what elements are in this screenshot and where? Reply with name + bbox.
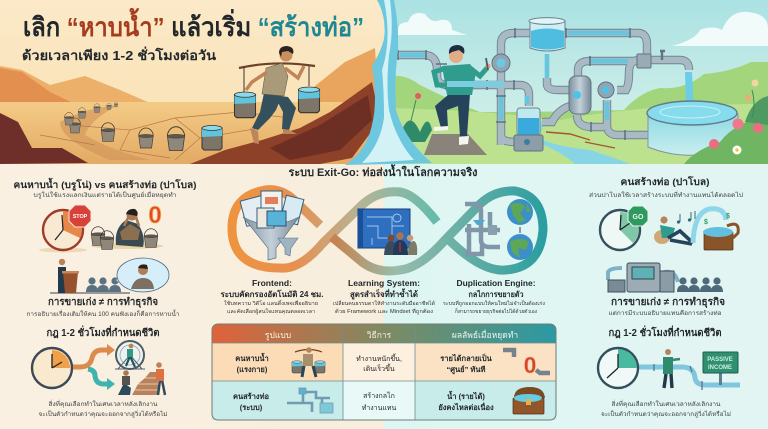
icon: pipe system mini bbox=[287, 388, 333, 413]
title: เลิก “หาบน้ำ” แล้วเริ่ม “สร้างท่อ” bbox=[23, 7, 364, 42]
gauge on valve bbox=[492, 54, 510, 72]
heading: carrier vs builder: คนหาบน้ำ (บรูโน่) vs คนสร้างท่อ (ปาโบล) bbox=[14, 177, 196, 192]
row: pipe builder bbox=[233, 390, 494, 412]
text: Learning System: Learning System: bbox=[348, 279, 420, 288]
text: Frontend bbox=[220, 279, 324, 315]
text: rule note left bbox=[38, 400, 168, 418]
table header: รูปแบบ bbox=[265, 330, 291, 341]
text: Learning System bbox=[333, 279, 435, 315]
icon: clock with branching arrows bbox=[32, 344, 115, 390]
water stream divider bbox=[345, 0, 432, 165]
icon: speaker at podium bbox=[50, 259, 130, 293]
comparison table bbox=[212, 324, 556, 420]
table header: ผลลัพธ์เมื่อหยุดทำ bbox=[452, 329, 518, 341]
clouds bbox=[398, 12, 768, 46]
pipe network bbox=[398, 28, 689, 145]
icon: builder laying bricks bbox=[118, 362, 165, 395]
row: water carrier bbox=[235, 352, 493, 375]
lower background bbox=[0, 160, 768, 429]
row: pipe builder: ยังคงไหลต่อเนื่อง bbox=[438, 401, 494, 412]
heading: Pablo: คนสร้างท่อ (ปาโบล) bbox=[620, 176, 710, 188]
row: pipe builder: ทำงานแทน bbox=[362, 404, 397, 412]
icon: zero with broken pipe: 0 bbox=[524, 352, 536, 378]
pump tank bbox=[514, 108, 543, 151]
icon: pipeline to passive income: PASSIVE bbox=[707, 357, 733, 363]
river bbox=[527, 122, 630, 164]
row: water carrier: ทำงานหนักขึ้น, bbox=[356, 352, 402, 363]
text: Learning System: สูตรสำเร็จที่ทำซ้ำได้ bbox=[350, 288, 418, 300]
icon: water flowing into treasure chest: $ bbox=[726, 213, 730, 220]
text: system note: แต่การมีระบบอธิบายแทนคือการสร้างท่อ bbox=[608, 309, 722, 317]
icon: funnel with documents bbox=[240, 191, 304, 260]
text: Frontend: ระบบคัดกรองอัตโนมัติ 24 ชม. bbox=[220, 289, 324, 299]
icon: hamster wheel runner bbox=[115, 341, 145, 369]
icon: despairing man with empty buckets bbox=[91, 209, 163, 250]
row: pipe builder: น้ำ (รายได้) bbox=[447, 390, 485, 401]
text: rule note left: สิ่งที่คุณเลือกทำในเศษเวลาหลังเลิกงาน bbox=[48, 400, 158, 408]
text: Pablo description: ส่วนปาโบลใช้เวลาสร้างระบบที่ทำงานแทนได้ตลอดไป bbox=[589, 191, 743, 199]
text: rule note right bbox=[601, 400, 731, 418]
text: selling note: การอธิบายเรื่องเดิมให้คน 100 คนฟังเองก็คือการหาบน้ำ bbox=[26, 308, 180, 318]
central filter vessel bbox=[569, 76, 614, 114]
heading: Exit-Go system: ระบบ Exit-Go: ท่อส่งน้ำในโลกความจริง bbox=[288, 164, 478, 179]
text: rule note left: จะเป็นตัวกำหนดว่าคุณจะออกจากลู่วิ่งได้หรือไม่ bbox=[38, 409, 168, 418]
tap valve bbox=[637, 51, 665, 68]
falling water bbox=[685, 72, 694, 110]
text: Duplication Engine: Duplication Engine: bbox=[456, 279, 536, 288]
text: Frontend: และคัดเลือกผู้สนใจแทนคุณตลอดเวลา bbox=[227, 308, 315, 315]
heading: 1-2 hour rule right: กฎ 1-2 ชั่วโมงที่กำหนดชีวิต bbox=[608, 325, 722, 339]
icon: thought cloud bbox=[116, 258, 169, 292]
rock: right ridge bbox=[190, 82, 380, 164]
icon: water flowing into treasure chest bbox=[693, 209, 738, 250]
small buckets on the trail bbox=[64, 102, 222, 150]
icon: treasure chest bbox=[513, 387, 545, 414]
panel: right column (pipe builder) bbox=[589, 176, 743, 418]
text: bruno description: บรูโน่ใช้แรงแลกเงินแต่รายได้เป็นศูนย์เมื่อหยุดทำ bbox=[34, 190, 176, 199]
heading: selling vs business right: การขายเก่ง ≠ การทำธุรกิจ bbox=[611, 296, 725, 308]
row: pipe builder: คนสร้างท่อ bbox=[233, 392, 269, 401]
table header bbox=[265, 329, 518, 341]
scene: pipe builder landscape bbox=[384, 0, 768, 164]
icon: zero with broken pipe bbox=[503, 350, 550, 378]
icon: clock with stop sign: STOP bbox=[73, 214, 88, 220]
subtitle: ด้วยเวลาเพียง 1-2 ชั่วโมงต่อวัน bbox=[22, 46, 216, 63]
rock: left bbox=[0, 113, 88, 164]
text: Duplication Engine: ระบบที่ถูกออกแบบให้คนใหม่ไม่จำเป็นต้องเก่ง bbox=[443, 299, 546, 307]
icon: machine bbox=[608, 263, 678, 292]
icon: red zero: 0 bbox=[148, 202, 162, 229]
icon: pipeline to passive income: INCOME bbox=[708, 365, 732, 371]
text: Frontend: ใช้บทความ วิดีโอ แลนดิ้งเพจเพื่ออธิบาย bbox=[224, 298, 318, 307]
icon: audience right bbox=[677, 277, 723, 292]
icon: relaxing man with music bbox=[654, 211, 695, 244]
panel: centre system bbox=[212, 164, 556, 420]
text: rule note right: จะเป็นตัวกำหนดว่าคุณจะออกจากลู่วิ่งได้หรือไม่ bbox=[601, 409, 731, 418]
character: pipe builder bbox=[434, 45, 504, 145]
row: pipe builder: (ระบบ) bbox=[240, 403, 263, 412]
text: Learning System: เปลี่ยนคนธรรมดาให้ทำงานระดับมืออาชีพได้ bbox=[333, 300, 435, 307]
table header: วิธีการ bbox=[367, 330, 392, 340]
row: pipe builder: สร้างกลไก bbox=[363, 391, 395, 400]
panel: left column (water carrier) bbox=[14, 177, 196, 418]
icon: blueprint with team bbox=[358, 209, 417, 255]
icon: carrier mini bbox=[292, 347, 325, 377]
text: Duplication Engine: ก็สามารถขยายธุรกิจต่อไปได้ด้วยตัวเอง bbox=[455, 307, 538, 315]
heading: selling vs business: การขายเก่ง ≠ การทำธุรกิจ bbox=[48, 296, 158, 308]
row: water carrier: เดินเร็วขึ้น bbox=[363, 362, 395, 373]
row: water carrier: (แรงกาย) bbox=[237, 365, 268, 374]
row: water carrier: คนหาบน้ำ bbox=[235, 352, 269, 363]
pool tank bbox=[647, 101, 738, 155]
water tank bbox=[529, 18, 565, 51]
heading: 1-2 hour rule: กฎ 1-2 ชั่วโมงที่กำหนดชีวิต bbox=[46, 325, 160, 339]
chart: infinity flow loop bbox=[232, 190, 543, 271]
icon: audience bbox=[86, 277, 121, 292]
text: Learning System: ด้วย Framework และ Mindset ที่ถูกต้อง bbox=[335, 308, 434, 315]
rock under builder bbox=[424, 134, 487, 155]
flowers bbox=[402, 80, 768, 164]
text: Duplication Engine bbox=[443, 279, 546, 315]
text: Duplication Engine: กลไกการขยายตัว bbox=[468, 289, 524, 299]
row: water carrier: รายได้กลายเป็น bbox=[440, 353, 493, 363]
icon: pipeline to passive income bbox=[598, 348, 740, 390]
row: water carrier: “ศูนย์” ทันที bbox=[447, 365, 485, 375]
icon: clock with go sign bbox=[600, 206, 648, 250]
icon: clock with go sign: GO bbox=[633, 214, 644, 221]
hills and meadow bbox=[384, 62, 768, 164]
scene: desert water carrier bbox=[0, 0, 384, 164]
icon: duplicating pipes and globes bbox=[465, 199, 533, 260]
text: Frontend: Frontend: bbox=[252, 279, 292, 288]
icon: clock with stop sign bbox=[39, 205, 91, 252]
icon: water flowing into treasure chest: $ bbox=[704, 219, 708, 226]
character: man carrying buckets bbox=[234, 46, 320, 144]
text: rule note right: สิ่งที่คุณเลือกทำในเศษเวลาหลังเลิกงาน bbox=[611, 400, 720, 408]
